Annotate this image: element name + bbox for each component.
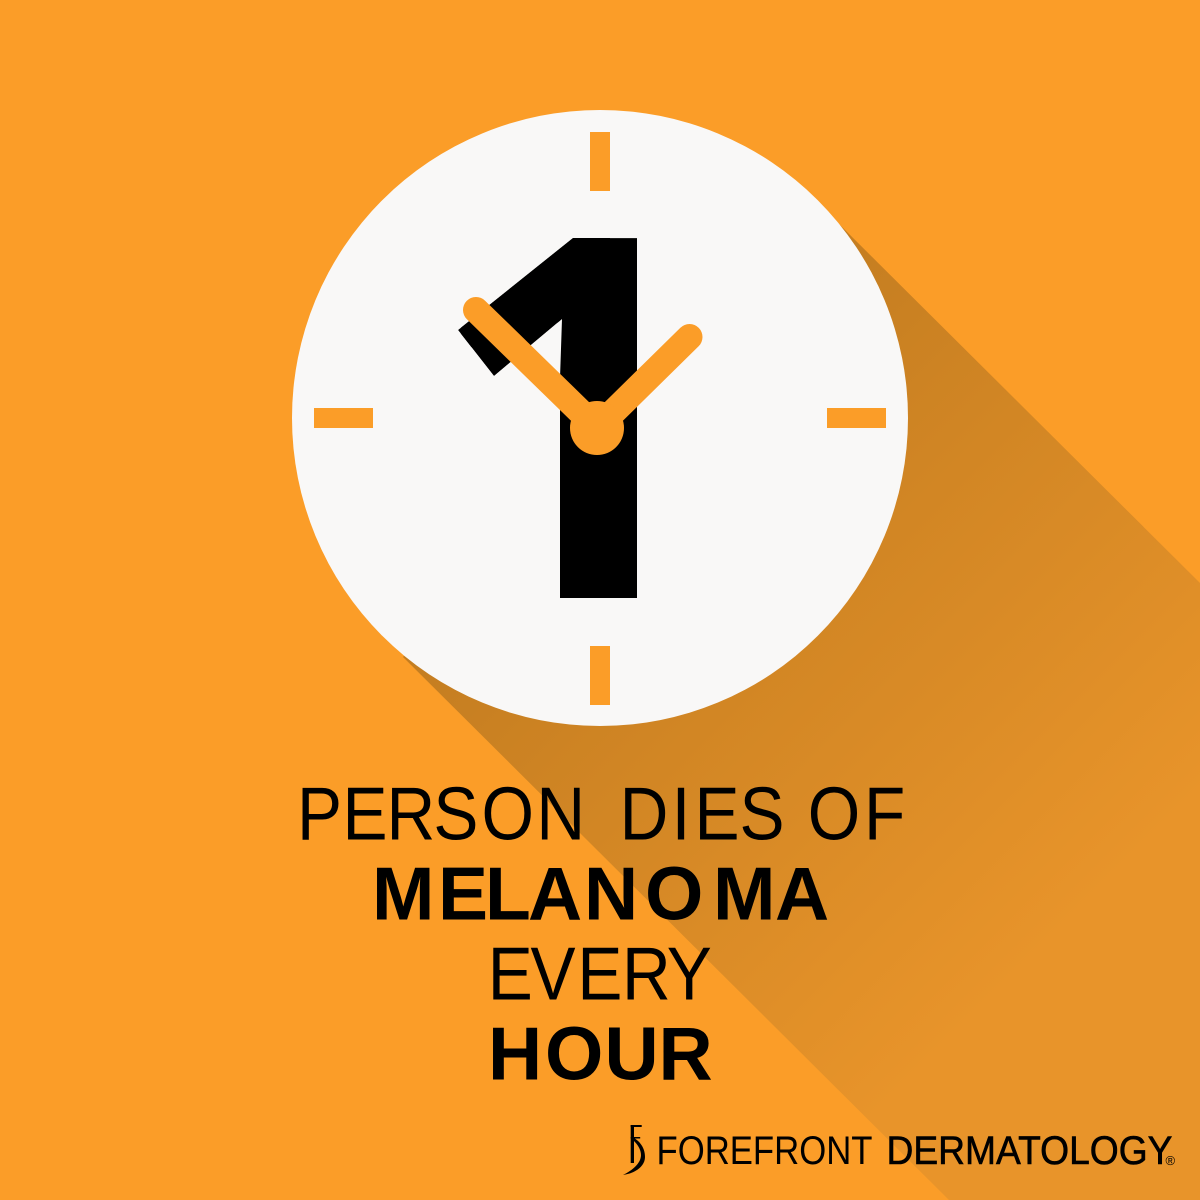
line: melanoma: MELANOMA xyxy=(372,852,829,936)
logo wordmark: forefront: FOREFRONT xyxy=(656,1129,872,1173)
logo: Forefront Dermatology xyxy=(623,1125,1176,1175)
big numeral 1: 1 xyxy=(421,124,747,709)
infographic canvas xyxy=(292,110,1200,1200)
clock face xyxy=(292,110,908,726)
line: hour: HOUR xyxy=(488,1012,713,1096)
registered mark: ® xyxy=(1166,1153,1176,1168)
logo monogram xyxy=(623,1125,645,1175)
logo wordmark: dermatology: DERMATOLOGY xyxy=(886,1129,1172,1173)
headline xyxy=(297,772,905,1096)
line: every: EVERY xyxy=(488,932,712,1016)
clock centre hub xyxy=(570,401,624,455)
line: person dies of: PERSON DIES OF xyxy=(297,772,905,856)
long diagonal clock shadow xyxy=(403,225,1200,1200)
big numeral 1 xyxy=(458,238,637,598)
clock xyxy=(292,110,908,726)
hour ticks xyxy=(314,132,886,705)
clock hands xyxy=(476,310,690,428)
